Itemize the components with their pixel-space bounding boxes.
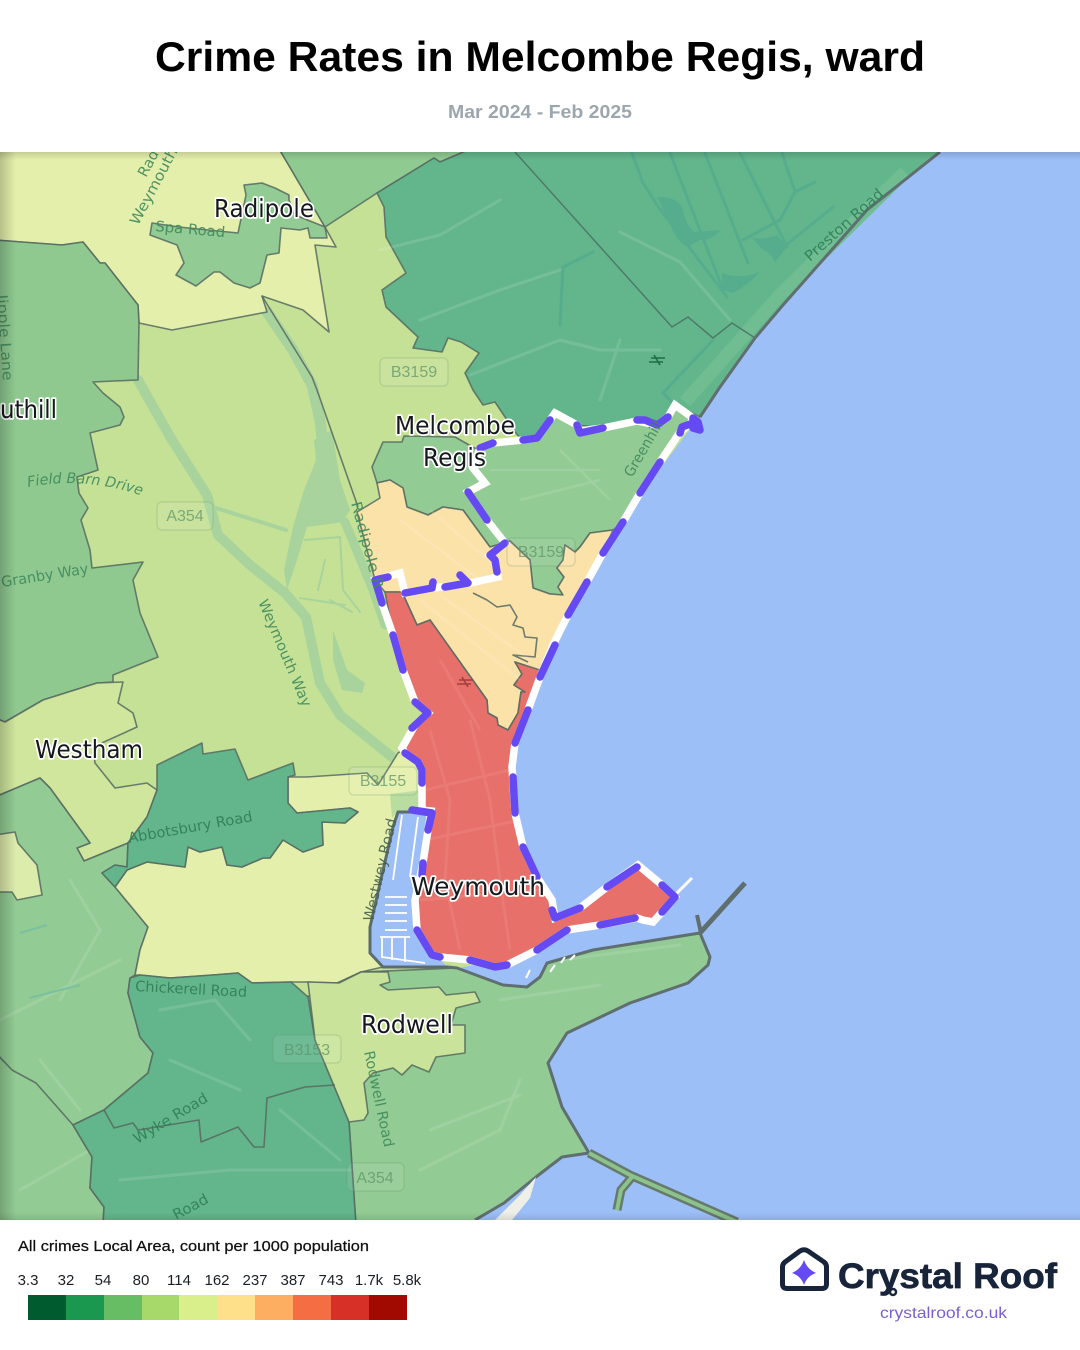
legend scale labels: 1.7k [355,1272,384,1289]
road shield: B3159 north: B3159 [391,364,437,381]
road shield: A354 west: A354 [166,508,204,525]
road shield: B3159 north [380,358,448,386]
south-west boundary and roads [0,880,120,1190]
icon: station, Weymouth [457,677,473,687]
road labels: Weymouth Way [254,597,314,710]
zone: central-west yellow [115,750,422,983]
zone: Radipole inner medium green [150,183,327,288]
legend scale labels [18,1272,422,1289]
place labels: Regis [423,443,486,472]
legend scale labels: 387 [280,1272,306,1289]
road shield: A354 south [347,1163,404,1191]
place labels: Rodwell [361,1010,453,1039]
subtitle: date range: Mar 2024 - Feb 2025 [448,102,632,122]
coast strip and channels in Preston [380,152,905,403]
place labels: Radipole [214,194,314,223]
zone: west pocket pale yellow [0,832,42,900]
road labels: Spa Road [155,219,226,241]
icon: station, Upwey [649,355,665,365]
coastline [700,152,940,417]
legend scale labels: 237 [242,1272,268,1289]
headland coastline [448,933,710,1220]
road labels: Rodwell Road [360,1050,396,1149]
water channels and lake [138,312,392,757]
zone: Abbotsbury dark green [102,743,358,887]
sea [0,152,1080,1220]
greener strip above marina [390,790,422,818]
road shield: A354 west [157,502,213,530]
ward boundary: white line [375,405,693,967]
legend title: All crimes Local Area, count per 1000 population [18,1239,369,1255]
road shield: B3155: B3155 [360,773,406,790]
road shield: B3153: B3153 [284,1042,330,1059]
zone: ward north medium green [372,405,693,595]
place labels: Melcombe [395,411,515,440]
map edge shading [0,152,1080,1220]
title: Crime Rates in Melcombe Regis, ward [155,33,925,80]
place labels [0,194,545,1039]
zone boundary beside railway [262,296,358,507]
legend scale labels: 162 [204,1272,230,1289]
zone: Chickerell dark green [73,973,356,1225]
cream internal boundary [473,593,537,662]
road labels: Westwey Road [361,817,401,923]
zone: south medium green headland [300,933,710,1225]
road labels: Chickerell Road [135,979,247,1001]
road labels: Greenhill [622,418,666,480]
zone: Westham yellowish green [0,682,157,861]
road labels: Rad [135,148,163,180]
road shield: A354 south: A354 [356,1170,394,1187]
road labels: Abbotsbury Road [127,809,254,847]
map panel [0,145,1080,1224]
place labels: Weymouth [411,872,545,901]
logo wordmark: Crystal Roof [838,1257,1057,1296]
legend scale labels: 743 [318,1272,344,1289]
legend scale labels: 80 [133,1272,149,1289]
road labels: Weymouth [127,145,181,228]
marina [370,812,448,967]
zone: Preston dark green [377,147,945,440]
zone: ward red, town centre [385,592,675,967]
zone: Radipole yellow-green [0,147,336,332]
road labels: Preston Road [802,186,887,265]
road labels: Field Barn Drive [28,472,142,494]
road shield: B3159 ward: B3159 [518,544,564,561]
road labels [0,145,887,1264]
ward boundary: purple dashes [375,417,700,967]
piers and breakwater [495,878,745,1222]
logo icon: house with star [782,1250,826,1288]
legend scale labels: 32 [58,1272,74,1289]
zone: west medium green [0,240,158,722]
zone: south-west medium green [0,778,153,1225]
zone: Rodwell light green [308,972,480,1122]
website link: crystalroof.co.uk [880,1305,1008,1322]
road labels: Road [170,1192,211,1224]
road labels: Granby Way [0,561,90,591]
road labels: Wyke Road [131,1090,211,1147]
road shield: B3155 [349,767,417,795]
road shield: B3159 ward [507,538,575,566]
legend scale labels: 54 [95,1272,111,1289]
street grid inside ward [400,450,610,950]
legend scale labels: 114 [167,1272,191,1289]
legend scale labels: 5.8k [393,1272,422,1289]
legend scale labels: 3.3 [18,1272,38,1289]
road shield: B3153 [273,1035,341,1063]
base land: light green zones [0,152,940,1220]
place labels: Westham [35,735,143,764]
road labels: Radipole R [347,500,386,591]
Chickerell inner boundary and roads [104,945,680,1180]
zone: north medium green [278,147,475,227]
legend colour bar [28,1295,407,1320]
zone: ward cream [357,480,613,730]
